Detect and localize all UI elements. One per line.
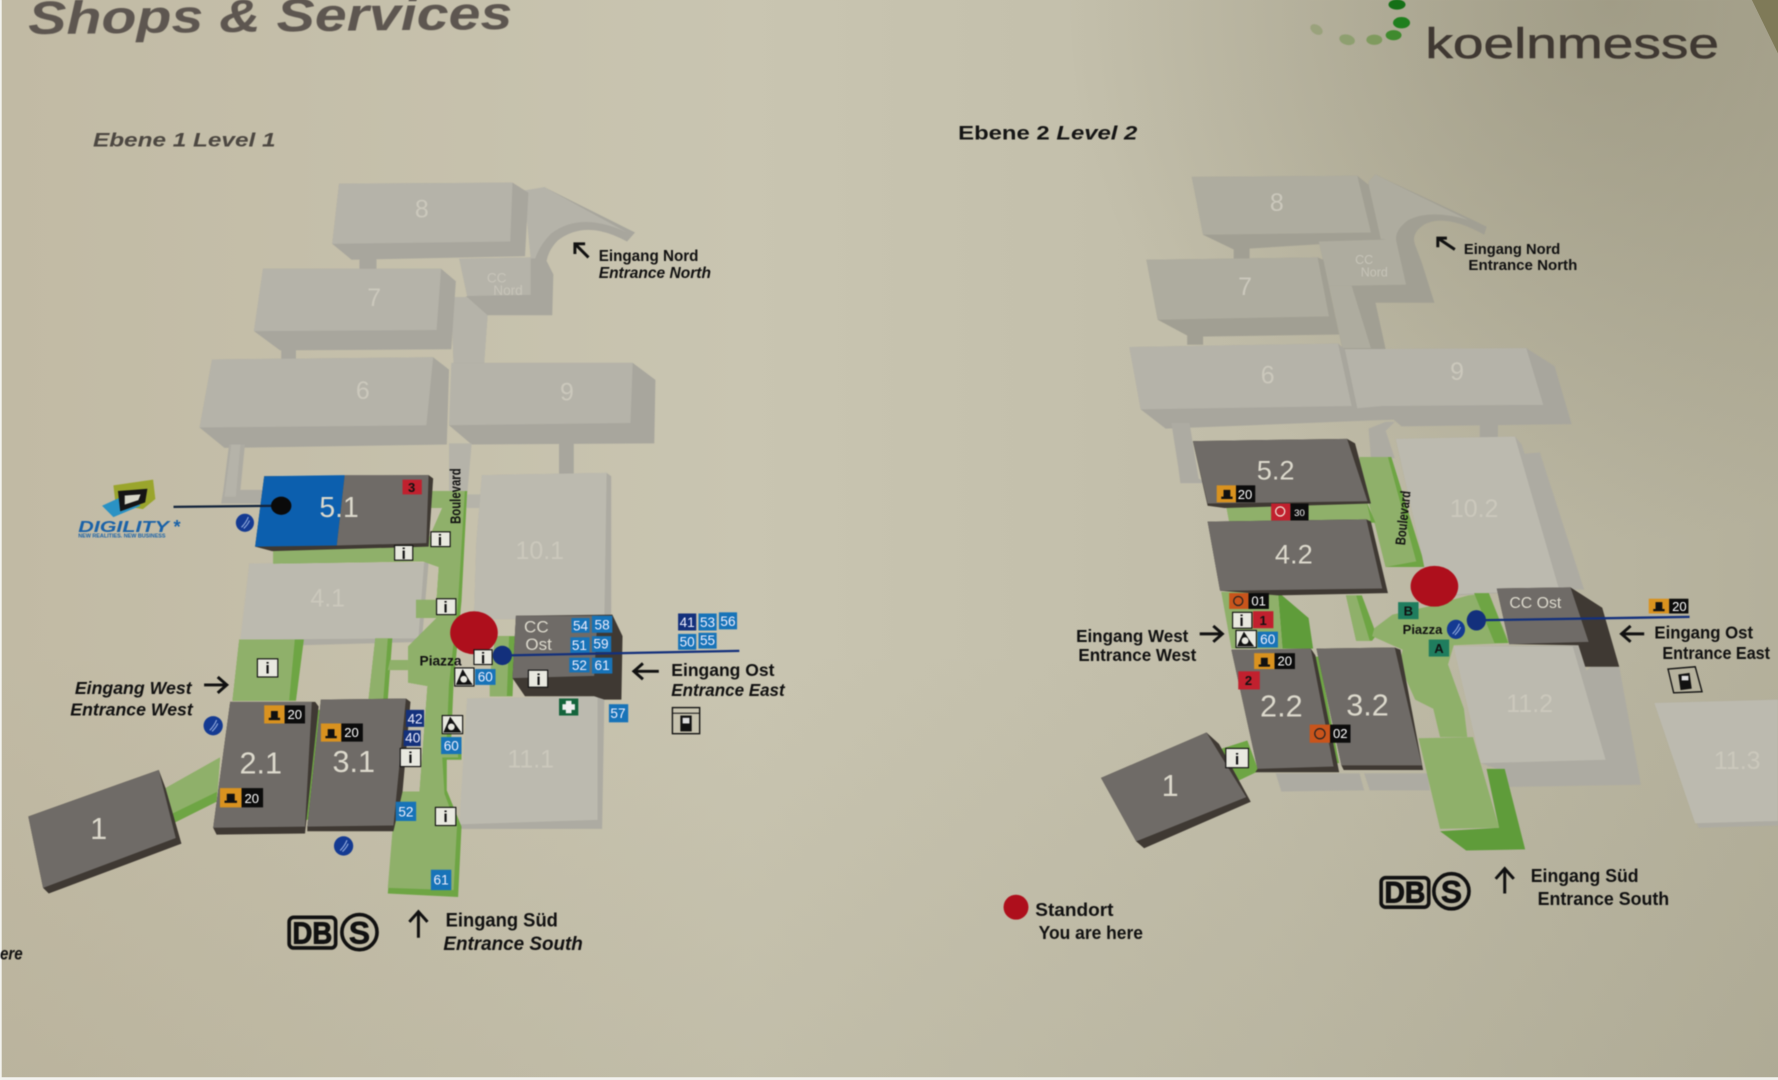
small badges level 1: i (438, 532, 442, 549)
entrance east level 2: Entrance East (1662, 643, 1770, 663)
small badges level 1: i (401, 546, 406, 563)
inactive halls north, level 1: 6 (356, 377, 370, 405)
small badges level 1: 42 (407, 711, 423, 726)
Boulevard label: Boulevard (448, 468, 464, 524)
DB and S-Bahn logos level 2: S (1441, 874, 1462, 910)
service tiles east: 41 (680, 615, 695, 630)
entrance north level 1 (575, 244, 711, 282)
CC Ost: CC (524, 618, 549, 637)
service tiles CC Ost: 52 (572, 658, 587, 673)
DB and S-Bahn logos level 2: DB (1385, 877, 1425, 910)
badges level 2: i (1239, 613, 1244, 630)
hall 3.2 (1316, 647, 1423, 770)
service tiles east: 53 (700, 615, 715, 630)
inactive halls north, level 2: 7 (1238, 273, 1252, 301)
badges level 2: i (1235, 751, 1239, 768)
Piazza label: Piazza (420, 654, 462, 669)
hall 2.1 (213, 702, 319, 835)
legend: you are here (1004, 895, 1143, 943)
shop tags 20 level 1: 20 (344, 725, 359, 740)
service tiles CC Ost: 61 (595, 658, 610, 673)
inactive halls north, level 2: 11.3 (1714, 747, 1761, 775)
small badges level 1: 61 (434, 872, 449, 887)
inactive halls north, level 2: CC (1355, 253, 1373, 267)
small badges level 1: i (536, 672, 541, 689)
CC Ost: Ost (525, 635, 552, 654)
hall 3.1: 3.1 (333, 745, 375, 779)
entrance east level 2 (1622, 622, 1770, 663)
legend: you are here: You are here (1039, 923, 1143, 943)
legend: you are here: Standort (1035, 900, 1114, 920)
service tiles CC Ost: 58 (595, 617, 610, 632)
small badges level 1: i (481, 650, 485, 667)
service tiles east: 56 (720, 614, 736, 629)
koelnmesse logo (1308, 0, 1719, 68)
Digility logo: DIGILITY (78, 519, 171, 536)
entrance south level 1: Entrance South (443, 934, 583, 955)
badges level 2: 01 (1251, 594, 1266, 609)
walkways level 2 (1219, 457, 1525, 850)
entrance north level 2: Eingang Nord (1464, 242, 1560, 258)
walkways level 1 (166, 491, 515, 897)
inactive halls north, level 2: Nord (1361, 266, 1388, 280)
tram icon level 2 (1668, 667, 1702, 693)
DB and S-Bahn logos level 1: DB (293, 916, 332, 950)
small badges level 1: i (408, 750, 413, 767)
heading: level 1: Ebene 1 Level 1 (93, 129, 276, 151)
inactive halls north, level 2: 6 (1261, 361, 1275, 389)
small badges level 1: i (265, 661, 270, 678)
inactive halls north, level 1: 4.1 (310, 585, 345, 613)
CC Ost level 2 (1497, 587, 1619, 667)
entrance south level 2: Entrance South (1538, 888, 1669, 909)
entrance north level 1: Entrance North (599, 265, 711, 282)
small badges level 1: i (443, 599, 448, 616)
shop tags 20 level 1 (220, 705, 363, 807)
hall 5.2 (1193, 439, 1371, 508)
small badges level 1: 60 (444, 739, 459, 754)
inactive halls north, level 1: 11.1 (507, 746, 554, 774)
CC Ost (513, 615, 623, 700)
hall 3.2: 3.2 (1346, 689, 1389, 723)
pointer line and dot east level 2 (1467, 610, 1690, 630)
hall 2.2: 2.2 (1260, 690, 1303, 724)
inactive halls north, level 2: 8 (1270, 189, 1284, 217)
inactive halls north, level 1: 8 (415, 196, 429, 224)
badges level 2: B (1404, 604, 1413, 619)
service tiles east: 50 (680, 634, 695, 649)
DB and S-Bahn logos level 1 (289, 914, 377, 950)
entrance east level 1: Entrance East (671, 680, 786, 700)
hall 3.1 (307, 699, 410, 831)
Digility logo (78, 480, 181, 540)
service tiles east: 55 (700, 633, 715, 648)
entrance east level 1 (634, 660, 786, 700)
small badges level 1: 3 (408, 480, 415, 495)
entrance south level 1 (409, 910, 583, 955)
hall 5.1 with blue Digility area (255, 475, 433, 551)
DB and S-Bahn logos level 1: S (349, 914, 370, 950)
entrance south level 2: Eingang Süd (1531, 865, 1639, 886)
hall 2.1: 2.1 (240, 746, 282, 780)
hall 1: 1 (90, 812, 107, 846)
service tiles CC Ost: 59 (593, 637, 609, 652)
badges level 2: 30 (1294, 508, 1305, 519)
Piazza label level 2: Piazza (1403, 622, 1443, 637)
hall 2.2 (1231, 649, 1339, 772)
small badges level 1: 40 (405, 731, 421, 746)
Digility logo: * (173, 517, 181, 537)
hall 1 level 2 (1101, 733, 1251, 848)
DB and S-Bahn logos level 2 (1381, 874, 1469, 910)
hall 5.2: 5.2 (1257, 455, 1295, 486)
service tiles CC Ost: 54 (573, 618, 589, 633)
badges level 2: 20 (1238, 487, 1252, 502)
hall 1 (28, 770, 181, 894)
inactive halls north, level 1 (200, 183, 655, 829)
small badges level 1: i (443, 809, 448, 826)
panel: map level 2 (1076, 175, 1778, 910)
pointer line and dot Digility (173, 497, 291, 515)
entrance south level 1: Eingang Süd (446, 910, 558, 931)
entrance west level 1: Eingang West (75, 678, 193, 698)
entrance north level 1: Eingang Nord (599, 248, 698, 265)
entrance north level 2 (1438, 238, 1577, 274)
badges level 2: A (1434, 641, 1444, 656)
inactive halls north, level 2: 9 (1450, 358, 1464, 386)
small badges level 1: 60 (478, 670, 493, 685)
hall 4.2: 4.2 (1275, 539, 1313, 570)
small badges level 1: 57 (610, 706, 626, 721)
Boulevard label level 2: Boulevard (1393, 490, 1415, 546)
badges level 2: 60 (1260, 632, 1276, 647)
badges level 2: 2 (1245, 673, 1252, 688)
tram icon level 1 (672, 708, 700, 734)
pointer line and dot east (493, 646, 739, 665)
service tiles east (678, 612, 737, 650)
inactive halls north, level 2: 11.2 (1506, 690, 1553, 718)
service tiles CC Ost (569, 616, 612, 674)
badges level 2: 1 (1260, 613, 1267, 628)
inactive halls north, level 2: 10.2 (1450, 495, 1498, 523)
badges level 2: 20 (1277, 654, 1292, 669)
inactive halls north, level 1: Nord (493, 283, 523, 298)
inactive halls north, level 1: 7 (367, 284, 381, 312)
entrance west level 1 (70, 677, 227, 720)
hall 5.1 with blue Digility area: 5.1 (319, 492, 359, 524)
badges level 2: 02 (1333, 726, 1348, 741)
entrance west level 2 (1076, 626, 1222, 665)
entrance west level 2: Entrance West (1078, 645, 1196, 665)
cut-off text: ere (0, 943, 23, 963)
koelnmesse logo: koelnmesse (1425, 20, 1719, 68)
shop tags 20 level 1: 20 (288, 707, 302, 722)
inactive halls north, level 1: 9 (560, 378, 574, 406)
entrance west level 1: Entrance West (70, 700, 194, 720)
entrance east level 2: Eingang Ost (1654, 622, 1753, 642)
entrance west level 2: Eingang West (1076, 626, 1189, 646)
entrance south level 2 (1496, 865, 1669, 909)
inactive halls north, level 2 (1129, 175, 1778, 828)
badges level 2: 20 (1672, 599, 1687, 614)
small badges level 1 (257, 480, 628, 890)
entrance north level 2: Entrance North (1468, 258, 1577, 274)
entrance east level 1: Eingang Ost (671, 660, 775, 680)
small badges level 1: 52 (398, 804, 414, 819)
you are here marker level 2 (1411, 566, 1458, 607)
Digility logo: NEW REALITIES. NEW BUSINESS (78, 534, 166, 540)
CC Ost level 2: CC Ost (1509, 595, 1562, 612)
inactive halls north, level 1: 10.1 (515, 537, 564, 565)
badges level 2 (1217, 485, 1688, 768)
panel: map level 1 (0, 183, 786, 963)
first aid icon (559, 699, 578, 716)
hall 1 level 2: 1 (1162, 769, 1179, 803)
shop tags 20 level 1: 20 (244, 791, 259, 806)
inactive halls north, level 1: CC (487, 270, 507, 285)
wheelchair icons level 1 (442, 668, 474, 734)
blue mandatory signs level 1 (204, 514, 353, 856)
you are here marker level 1 (450, 611, 498, 654)
heading: level 2: Ebene 2 Level 2 (958, 122, 1137, 144)
service tiles CC Ost: 51 (572, 638, 587, 653)
hall 4.2 (1208, 519, 1388, 595)
